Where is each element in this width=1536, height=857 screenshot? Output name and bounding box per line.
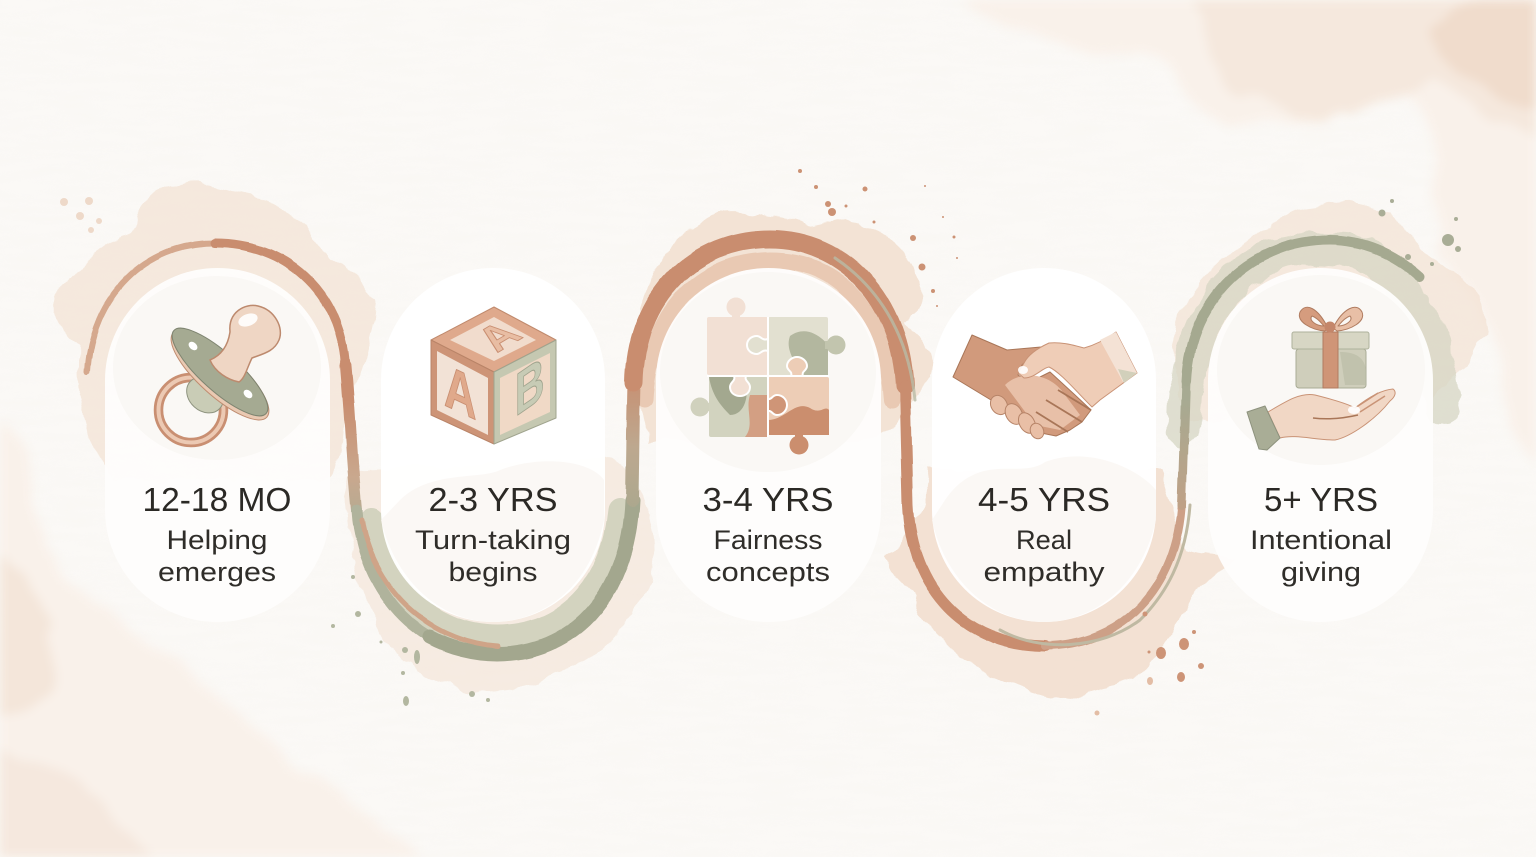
lower wash bbox=[932, 456, 1156, 622]
pale band under final arch bbox=[1183, 248, 1443, 430]
path segment 4: terracotta valley bbox=[905, 385, 1045, 646]
piece bottom right bbox=[768, 377, 829, 454]
palm highlight bbox=[1005, 375, 1080, 430]
panel: 5+ years bbox=[1208, 268, 1433, 622]
path segment 5: sage arch bbox=[1186, 240, 1420, 382]
pill card bbox=[1208, 268, 1433, 622]
description line 2: begins bbox=[448, 557, 538, 587]
age label: 2-3 YRS bbox=[428, 481, 558, 518]
icon wash bbox=[113, 276, 321, 460]
description line 2: empathy bbox=[984, 557, 1105, 587]
interlocking knobs bbox=[730, 336, 807, 415]
age label: 5+ YRS bbox=[1264, 481, 1378, 518]
icon: alphabet block: A bbox=[466, 315, 532, 359]
open hand bbox=[1268, 389, 1395, 440]
description line 2: emerges bbox=[158, 557, 276, 587]
description: Helping bbox=[166, 525, 268, 555]
watercolor washes behind the path bbox=[50, 182, 1484, 698]
panel: 3-4 years bbox=[656, 268, 881, 586]
icon: handshake bbox=[953, 332, 1137, 441]
age label: 4-5 YRS bbox=[978, 481, 1110, 518]
seams between pieces bbox=[707, 317, 829, 437]
flowing developmental path bbox=[87, 239, 1443, 654]
right cuff bbox=[1100, 332, 1137, 382]
fingers bbox=[987, 392, 1046, 441]
icon: puzzle pieces bbox=[690, 298, 846, 454]
description: Real bbox=[1016, 525, 1072, 555]
sleeve cuff bbox=[1247, 406, 1280, 450]
corner wash: top right bbox=[960, 0, 1536, 500]
panel: 2-3 years bbox=[381, 268, 605, 622]
description: Fairness bbox=[714, 525, 822, 555]
gift box bbox=[1296, 349, 1366, 388]
lower wash bbox=[381, 461, 604, 622]
icon: alphabet block bbox=[431, 307, 556, 444]
icon wash bbox=[1217, 275, 1425, 465]
description line 2: concepts bbox=[706, 557, 830, 587]
path segment 3: terracotta arch bbox=[634, 239, 905, 385]
corner wash: bottom left bbox=[0, 400, 440, 857]
pill card bbox=[381, 268, 605, 622]
icon wash bbox=[660, 272, 876, 472]
pill card bbox=[932, 268, 1156, 622]
piece top right bbox=[768, 317, 846, 375]
panel: 12-18 months bbox=[105, 268, 330, 622]
icon: gift on open hand bbox=[1247, 307, 1395, 450]
path segment 1: thin first arch bbox=[87, 243, 215, 372]
description: Intentional bbox=[1250, 525, 1392, 555]
pale terracotta band under third arch bbox=[645, 260, 892, 400]
description: Turn-taking bbox=[415, 525, 571, 555]
paint splatter dots bbox=[60, 169, 1461, 716]
icon: alphabet block: B bbox=[515, 342, 544, 430]
pill card bbox=[105, 268, 330, 622]
thumb nail and grip lines bbox=[1018, 366, 1028, 374]
piece top left bbox=[707, 298, 768, 375]
piece bottom left bbox=[690, 377, 768, 437]
path segment 2: sage valley bbox=[357, 510, 430, 637]
age label: 3-4 YRS bbox=[702, 481, 834, 518]
panel: 4-5 years bbox=[932, 268, 1156, 622]
pale sage band under second valley bbox=[372, 510, 620, 637]
bow bbox=[1299, 307, 1328, 331]
icon: alphabet block: A bbox=[444, 351, 476, 433]
icon: pacifier bbox=[158, 305, 281, 442]
left hand and arm bbox=[953, 335, 1091, 436]
description line 2: giving bbox=[1281, 557, 1361, 587]
age label: 12-18 MO bbox=[142, 481, 292, 518]
pill card bbox=[656, 268, 881, 622]
right hand and arm bbox=[1018, 332, 1137, 407]
